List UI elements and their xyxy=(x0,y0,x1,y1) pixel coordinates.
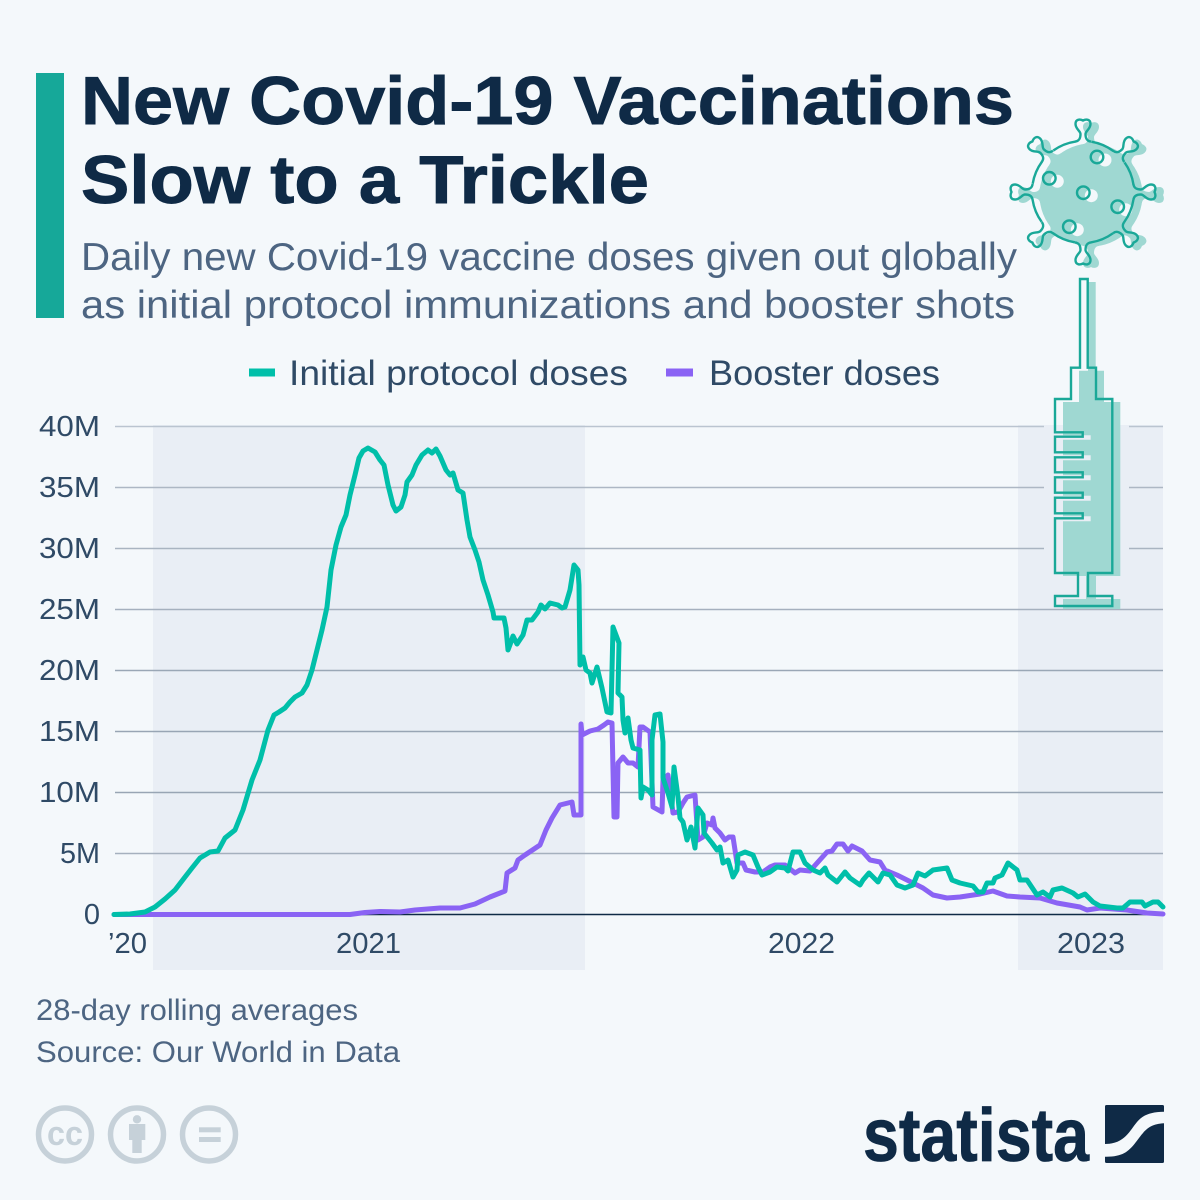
y axis labels: 25M xyxy=(39,594,100,626)
icon: syringe xyxy=(1055,279,1120,609)
legend: initial protocol doses: Initial protocol doses xyxy=(289,354,628,393)
icon: virus xyxy=(1011,120,1163,267)
title xyxy=(81,63,1014,218)
x axis labels: 2021 xyxy=(336,928,401,960)
x axis labels: ’20 xyxy=(108,928,147,960)
y axis labels: 20M xyxy=(39,655,100,687)
x axis labels xyxy=(108,928,1125,960)
footnote and source: 28-day rolling averages xyxy=(36,994,358,1027)
line: booster doses xyxy=(114,722,1163,914)
subtitle xyxy=(81,236,1018,327)
legend: booster doses: Booster doses xyxy=(709,354,940,393)
title accent bar xyxy=(36,73,64,318)
legend xyxy=(249,354,940,393)
y axis labels: 10M xyxy=(39,777,100,809)
line: initial protocol doses xyxy=(114,448,1163,914)
y axis labels: 5M xyxy=(60,838,100,870)
y axis labels: 35M xyxy=(39,472,100,504)
icon: no derivatives xyxy=(182,1108,236,1161)
y axis labels xyxy=(39,411,100,931)
x axis labels: 2023 xyxy=(1057,928,1125,960)
shaded year bands xyxy=(153,425,1163,970)
x axis labels: 2022 xyxy=(768,928,835,960)
title: New Covid-19 Vaccinations xyxy=(81,63,1014,139)
icon: cc xyxy=(38,1108,92,1161)
y axis labels: 30M xyxy=(39,533,100,565)
y axis labels: 0 xyxy=(84,899,100,931)
subtitle: as initial protocol immunizations and booster shots xyxy=(81,284,1015,327)
icon: statista mark xyxy=(1105,1105,1164,1163)
footnote and source: Source: Our World in Data xyxy=(36,1036,400,1069)
y axis labels: 15M xyxy=(39,716,100,748)
subtitle: Daily new Covid-19 vaccine doses given out globally xyxy=(81,236,1018,279)
line chart: doses xyxy=(114,448,1163,914)
title: Slow to a Trickle xyxy=(81,142,649,218)
footnote and source xyxy=(36,994,400,1069)
statista logo: statista xyxy=(863,1093,1090,1177)
icon: cc: cc xyxy=(47,1115,83,1153)
y axis labels: 40M xyxy=(39,411,100,443)
licence icons xyxy=(38,1108,236,1161)
icon: attribution xyxy=(110,1108,164,1161)
